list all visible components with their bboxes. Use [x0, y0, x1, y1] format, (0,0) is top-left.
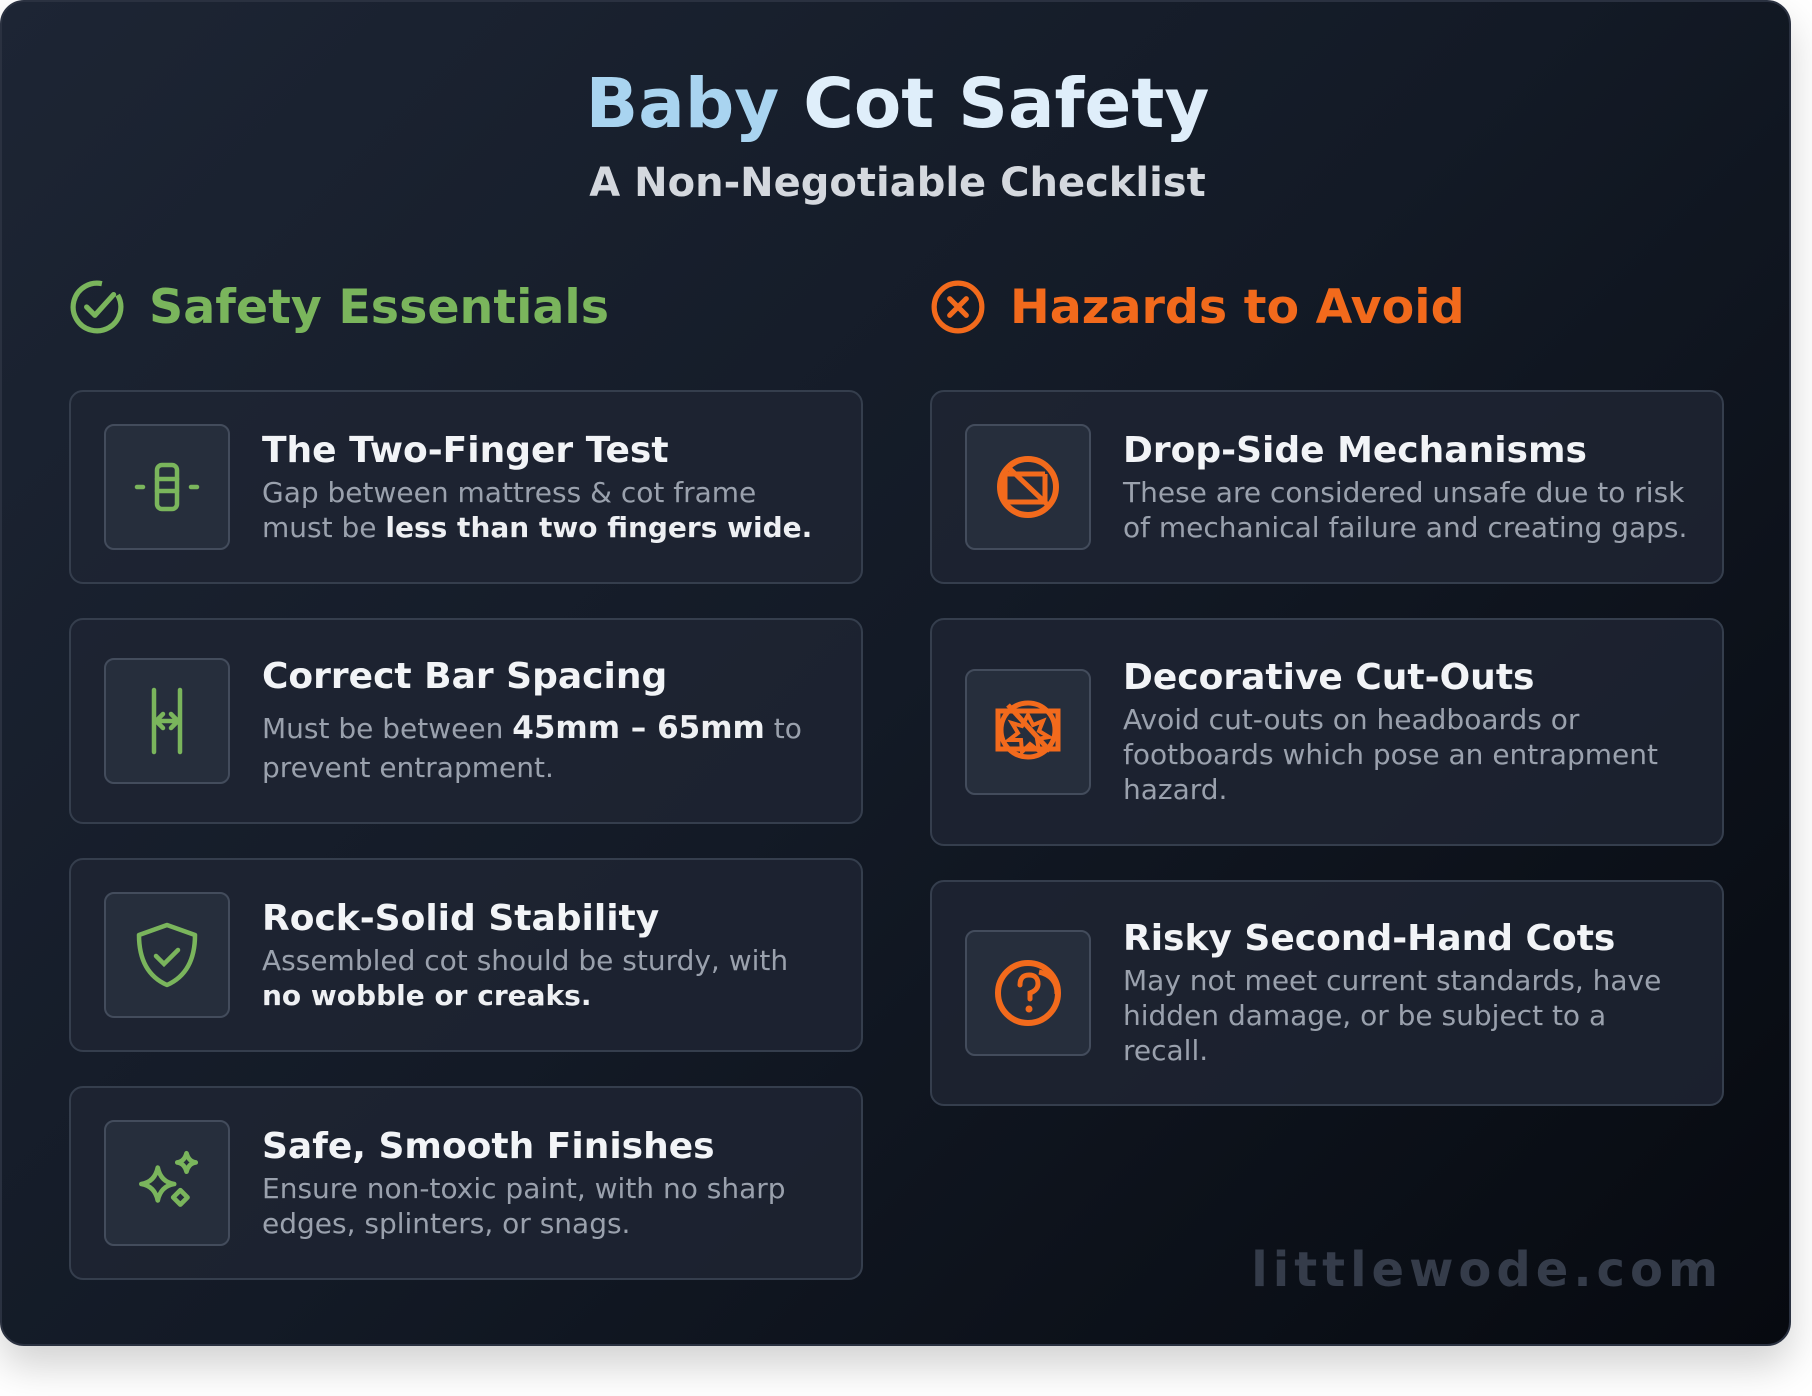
text: must be less than two fingers wide. [262, 510, 812, 544]
card: finishes [69, 1086, 863, 1280]
text [262, 656, 802, 784]
text: Ensure non-toxic paint, with no sharp [262, 1172, 786, 1204]
icon: question [965, 930, 1091, 1056]
text: recall. [1123, 1034, 1208, 1067]
text: Drop-Side Mechanisms [1123, 430, 1587, 470]
text: Decorative Cut-Outs [1123, 657, 1534, 698]
card: bar spacing [69, 618, 863, 824]
icon: shield [104, 892, 230, 1018]
footer brand: littlewode.com [1251, 1242, 1723, 1298]
text: May not meet current standards, have [1123, 964, 1661, 997]
text: Assembled cot should be sturdy, with [262, 944, 788, 976]
text [1123, 657, 1658, 806]
text: edges, splinters, or snags. [262, 1206, 630, 1240]
icon: no cut-outs [965, 669, 1091, 795]
text: no wobble or creaks. [262, 978, 591, 1012]
text: The Two-Finger Test [262, 430, 669, 470]
text: of mechanical failure and creating gaps. [1123, 510, 1687, 544]
text: hidden damage, or be subject to a [1123, 999, 1606, 1032]
subtitle: A Non-Negotiable Checklist [589, 160, 1206, 206]
text: Gap between mattress & cot frame [262, 476, 756, 508]
card: second-hand [930, 880, 1724, 1106]
card: two-finger test [69, 390, 863, 584]
title: Baby Cot Safety [586, 64, 1209, 144]
text [1123, 918, 1661, 1067]
icon: bars [104, 658, 230, 784]
text: These are considered unsafe due to risk [1123, 476, 1684, 508]
text: Must be between 45mm – 65mm to [262, 710, 802, 746]
icon: mattress gap [104, 424, 230, 550]
heading: safety essentials: Safety Essentials [149, 280, 609, 334]
text [262, 898, 788, 1012]
text: prevent entrapment. [262, 750, 554, 784]
text [262, 430, 812, 544]
icon: sparkles [104, 1120, 230, 1246]
text: Correct Bar Spacing [262, 656, 667, 696]
icon: no drop-side [965, 424, 1091, 550]
card: cut-outs [930, 618, 1724, 846]
text [262, 1126, 786, 1240]
text: footboards which pose an entrapment [1123, 738, 1658, 771]
text: Rock-Solid Stability [262, 898, 659, 938]
text [1122, 430, 1687, 544]
text: hazard. [1123, 773, 1227, 806]
text: Avoid cut-outs on headboards or [1123, 703, 1579, 736]
text: Safe, Smooth Finishes [262, 1126, 715, 1166]
card: drop-side [930, 390, 1724, 584]
card: stability [69, 858, 863, 1052]
text: Risky Second-Hand Cots [1123, 918, 1615, 959]
heading: hazards: Hazards to Avoid [1010, 280, 1465, 334]
